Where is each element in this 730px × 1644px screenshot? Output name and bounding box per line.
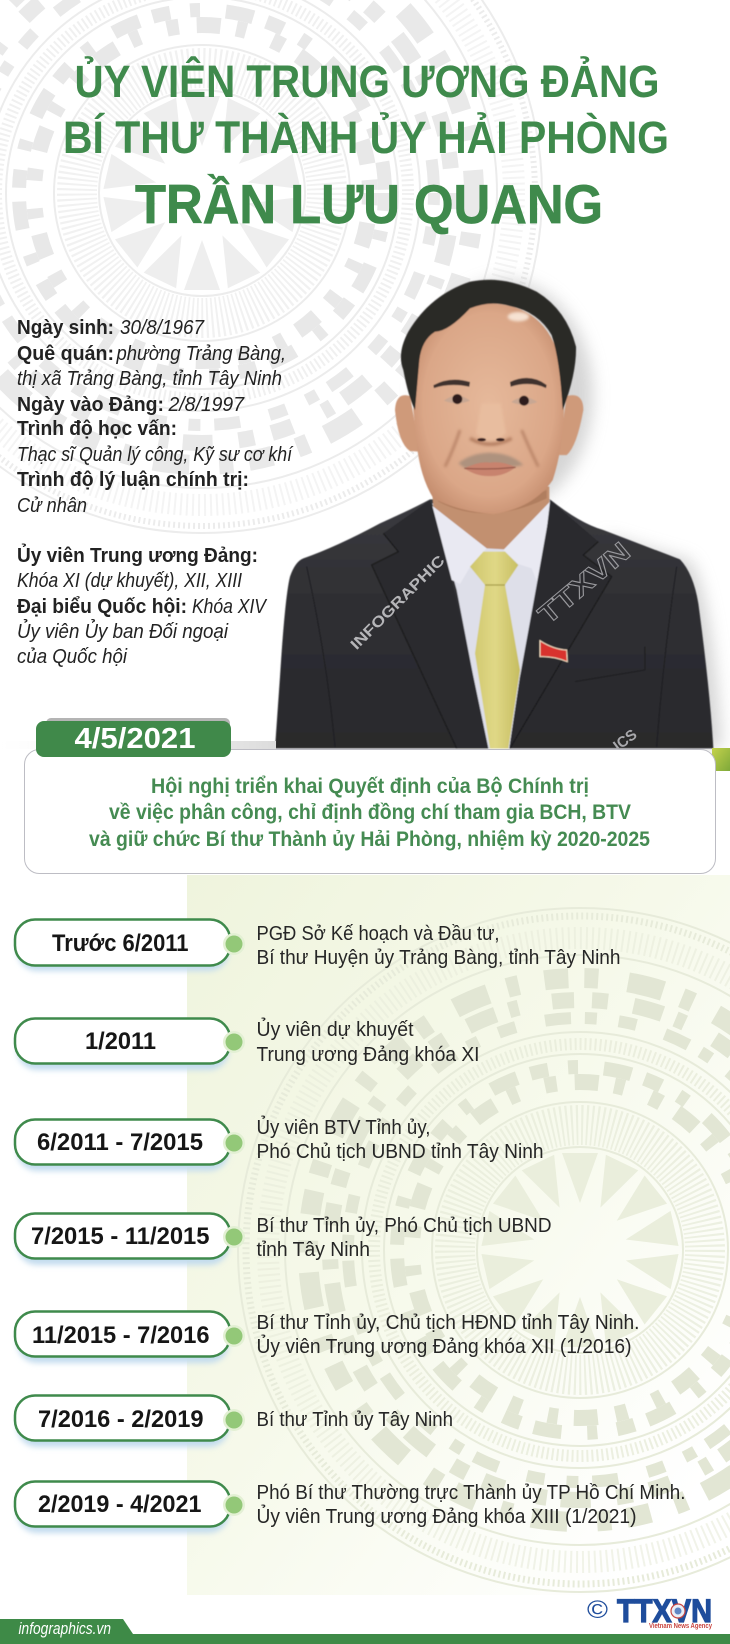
card text: Hội nghị triển khai Quyết định của Bộ Chính trị bbox=[151, 775, 589, 798]
national assembly: Đại biểu Quốc hội: bbox=[17, 596, 187, 618]
timeline row 7: Ủy viên Trung ương Đảng khóa XIII (1/2021) bbox=[256, 1504, 636, 1528]
home town: phường Trảng Bàng, bbox=[116, 343, 286, 365]
date tab: 4/5/2021 bbox=[74, 723, 196, 755]
timeline row 5: Bí thư Tỉnh ủy, Chủ tịch HĐND tỉnh Tây Ninh. bbox=[256, 1312, 640, 1334]
timeline row 2: 1/2011 bbox=[85, 1028, 156, 1055]
logo TTXVN bbox=[587, 1593, 712, 1630]
portrait photo bbox=[275, 280, 722, 755]
timeline row 5: Ủy viên Trung ương Đảng khóa XII (1/2016) bbox=[256, 1334, 632, 1358]
right lapel bbox=[509, 500, 612, 748]
date tab bbox=[36, 718, 231, 757]
timeline row 4: 7/2015 - 11/2015 bbox=[31, 1223, 210, 1250]
watermark: cut text: ICS bbox=[610, 726, 640, 755]
eyes bbox=[444, 396, 470, 403]
personal info bbox=[17, 317, 294, 668]
card box bbox=[24, 750, 716, 874]
party join date bbox=[17, 394, 245, 416]
background: drum pattern top bbox=[0, 0, 542, 533]
party join date: Ngày vào Đảng: bbox=[17, 394, 164, 416]
green accent right of card bbox=[712, 748, 730, 771]
timeline row 7: Phó Bí thư Thường trực Thành ủy TP Hồ Chí Minh. bbox=[256, 1482, 686, 1504]
national assembly bbox=[17, 596, 267, 668]
central committee bbox=[17, 543, 258, 592]
watermark: TTXVN: TTXVN bbox=[532, 536, 636, 630]
neck bbox=[432, 487, 549, 549]
party badge bbox=[540, 641, 567, 662]
title line 3: name: TRẦN LƯU QUANG bbox=[135, 173, 603, 235]
timeline row 2: Ủy viên dự khuyết bbox=[256, 1017, 414, 1041]
home town bbox=[17, 343, 286, 390]
logo globe bbox=[671, 1604, 685, 1618]
sleeve seams bbox=[307, 567, 677, 747]
left lapel bbox=[372, 500, 488, 748]
timeline row 3 bbox=[15, 1115, 544, 1171]
timeline row 7 bbox=[15, 1482, 686, 1533]
card text: về việc phân công, chỉ định đồng chí tham gia BCH, BTV bbox=[109, 801, 631, 824]
political theory: Trình độ lý luận chính trị: bbox=[17, 469, 249, 491]
suit bbox=[275, 499, 713, 748]
copyright mark: © bbox=[587, 1596, 609, 1624]
tie bbox=[470, 552, 520, 748]
agency subtitle: Vietnam News Agency bbox=[649, 1623, 712, 1630]
national assembly: của Quốc hội bbox=[17, 646, 128, 668]
central committee: Ủy viên Trung ương Đảng: bbox=[17, 543, 258, 567]
facial shading bbox=[445, 312, 538, 468]
photo shadow bbox=[417, 280, 722, 748]
home town: Quê quán: bbox=[17, 343, 114, 365]
education: Trình độ học vấn: bbox=[17, 418, 177, 440]
footer bar bbox=[0, 1619, 730, 1644]
timeline row 2: Trung ương Đảng khóa XI bbox=[256, 1044, 480, 1066]
political theory bbox=[17, 469, 249, 517]
timeline row 1 bbox=[15, 920, 620, 971]
education: Thạc sĩ Quản lý công, Kỹ sư cơ khí bbox=[17, 444, 294, 466]
timeline row 7: 2/2019 - 4/2021 bbox=[38, 1491, 202, 1518]
highlight card bbox=[24, 718, 716, 874]
national assembly: Khóa XIV bbox=[192, 596, 267, 618]
timeline row 1: Trước 6/2011 bbox=[52, 930, 188, 957]
agency name: TTXVN bbox=[617, 1593, 712, 1629]
timeline row 5 bbox=[15, 1312, 640, 1363]
timeline bbox=[15, 920, 686, 1533]
timeline row 1: PGĐ Sở Kế hoạch và Đầu tư, bbox=[256, 923, 500, 945]
card text: và giữ chức Bí thư Thành ủy Hải Phòng, nhiệm kỳ 2020-2025 bbox=[89, 828, 650, 851]
political theory: Cử nhân bbox=[17, 495, 87, 517]
eyebrows bbox=[433, 378, 547, 388]
party join date: 2/8/1997 bbox=[168, 394, 245, 416]
title bbox=[63, 56, 669, 235]
card text bbox=[89, 775, 650, 851]
timeline row 3: Ủy viên BTV Tỉnh ủy, bbox=[256, 1115, 430, 1139]
birth date: Ngày sinh: bbox=[17, 317, 114, 339]
watermark: infographics: INFOGRAPHIC bbox=[347, 552, 449, 653]
background: green panel with drum bbox=[187, 875, 730, 1595]
timeline row 5: 11/2015 - 7/2016 bbox=[32, 1322, 210, 1349]
home town: thị xã Trảng Bàng, tỉnh Tây Ninh bbox=[17, 368, 282, 390]
mouth bbox=[464, 462, 516, 476]
ears bbox=[395, 395, 420, 452]
shirt collar bbox=[432, 506, 487, 584]
nostrils bbox=[477, 438, 486, 441]
face bbox=[413, 303, 564, 514]
timeline row 1: Bí thư Huyện ủy Trảng Bàng, tỉnh Tây Ninh bbox=[256, 947, 620, 969]
education bbox=[17, 418, 294, 466]
website: infographics.vn bbox=[18, 1619, 111, 1638]
timeline row 4: Bí thư Tỉnh ủy, Phó Chủ tịch UBND bbox=[256, 1215, 552, 1237]
national assembly: Ủy viên Ủy ban Đối ngoại bbox=[17, 619, 229, 643]
hair bbox=[401, 280, 576, 410]
timeline row 3: 6/2011 - 7/2015 bbox=[37, 1129, 203, 1156]
timeline row 6 bbox=[15, 1396, 453, 1447]
birth date bbox=[17, 317, 205, 339]
shadow strip left of photo bbox=[0, 741, 276, 749]
timeline row 6: Bí thư Tỉnh ủy Tây Ninh bbox=[256, 1409, 453, 1431]
shirt bbox=[432, 500, 550, 748]
title line 1: ỦY VIÊN TRUNG ƯƠNG ĐẢNG bbox=[74, 56, 660, 107]
birth date: 30/8/1967 bbox=[120, 317, 205, 339]
pocket bbox=[575, 647, 645, 682]
timeline row 3: Phó Chủ tịch UBND tỉnh Tây Ninh bbox=[256, 1141, 544, 1163]
timeline row 2 bbox=[15, 1017, 480, 1070]
title line 2: BÍ THƯ THÀNH ỦY HẢI PHÒNG bbox=[63, 112, 669, 163]
central committee: Khóa XI (dự khuyết), XII, XIII bbox=[17, 570, 242, 592]
timeline row 4: tỉnh Tây Ninh bbox=[256, 1239, 370, 1261]
timeline row 4 bbox=[15, 1214, 552, 1265]
timeline row 6: 7/2016 - 2/2019 bbox=[38, 1406, 204, 1433]
